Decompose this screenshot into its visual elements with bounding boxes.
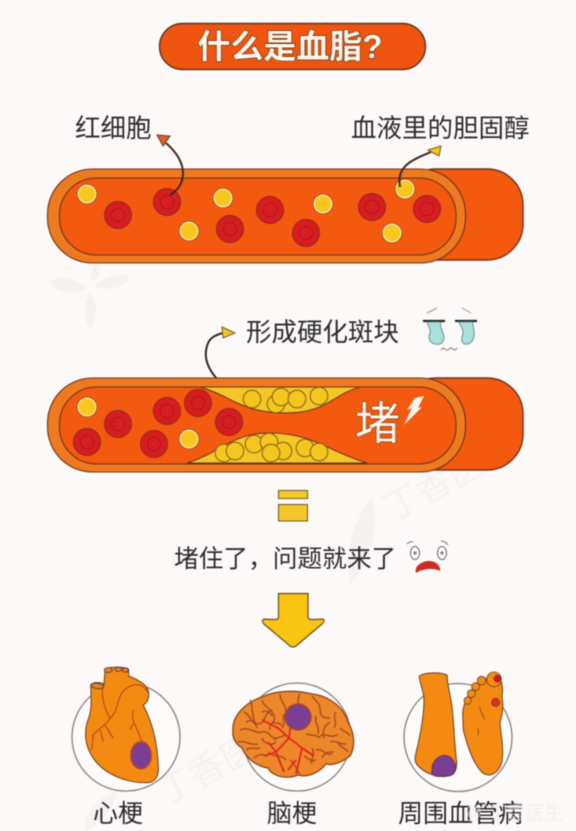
plaque: top <box>200 387 360 413</box>
icon: foot top <box>415 673 457 777</box>
arrow: to cholesterol label <box>399 146 441 187</box>
panel: heart <box>72 667 180 791</box>
arrow: to plaque label <box>206 327 236 396</box>
icon: shocked face <box>407 541 448 573</box>
plaque: bottom <box>187 433 367 463</box>
icon: lightning bolt <box>404 396 424 425</box>
watermark text: @ 丁香医生 <box>463 802 564 824</box>
label: cholesterol in blood: 血液里的胆固醇 <box>351 115 530 143</box>
cholesterol particles <box>77 397 199 449</box>
icon: blackened toes <box>432 755 456 776</box>
label: cerebral infarction: 脑梗 <box>267 800 317 828</box>
icon: brain <box>233 691 354 777</box>
text: problems arise: 堵住了，问题就来了 <box>174 545 396 573</box>
title text: 什么是血脂? <box>197 28 383 65</box>
text: blocked: 堵 <box>355 398 400 449</box>
panel: brain <box>233 683 354 791</box>
red blood cells <box>104 188 440 246</box>
icon: heart <box>86 667 158 783</box>
icon: brain infarct area <box>285 704 311 730</box>
icon: crying eyes <box>423 308 477 350</box>
panel: healthy blood vessel <box>48 169 523 263</box>
panel: blocked blood vessel <box>48 378 523 472</box>
icon: ulcer spots <box>492 675 501 706</box>
icon: brain vessels <box>262 720 314 774</box>
label: peripheral vascular disease: 周围血管病 <box>398 800 523 828</box>
arrow: to red blood cell label <box>157 135 183 195</box>
equals sign <box>278 490 308 521</box>
cholesterol particles <box>77 179 415 243</box>
icon: foot sole <box>463 672 503 775</box>
icon: heart infarct area <box>131 742 151 769</box>
arrow: downward <box>262 594 324 647</box>
text: 丁香医生 <box>150 709 296 813</box>
label: red blood cell: 红细胞 <box>75 115 152 143</box>
label: myocardial infarction: 心梗 <box>93 800 143 828</box>
text: 丁香医生 <box>377 425 523 529</box>
panel: feet <box>404 672 512 792</box>
title pill <box>160 24 426 70</box>
label: plaque formation: 形成硬化斑块 <box>246 319 399 347</box>
red blood cells <box>74 390 242 458</box>
